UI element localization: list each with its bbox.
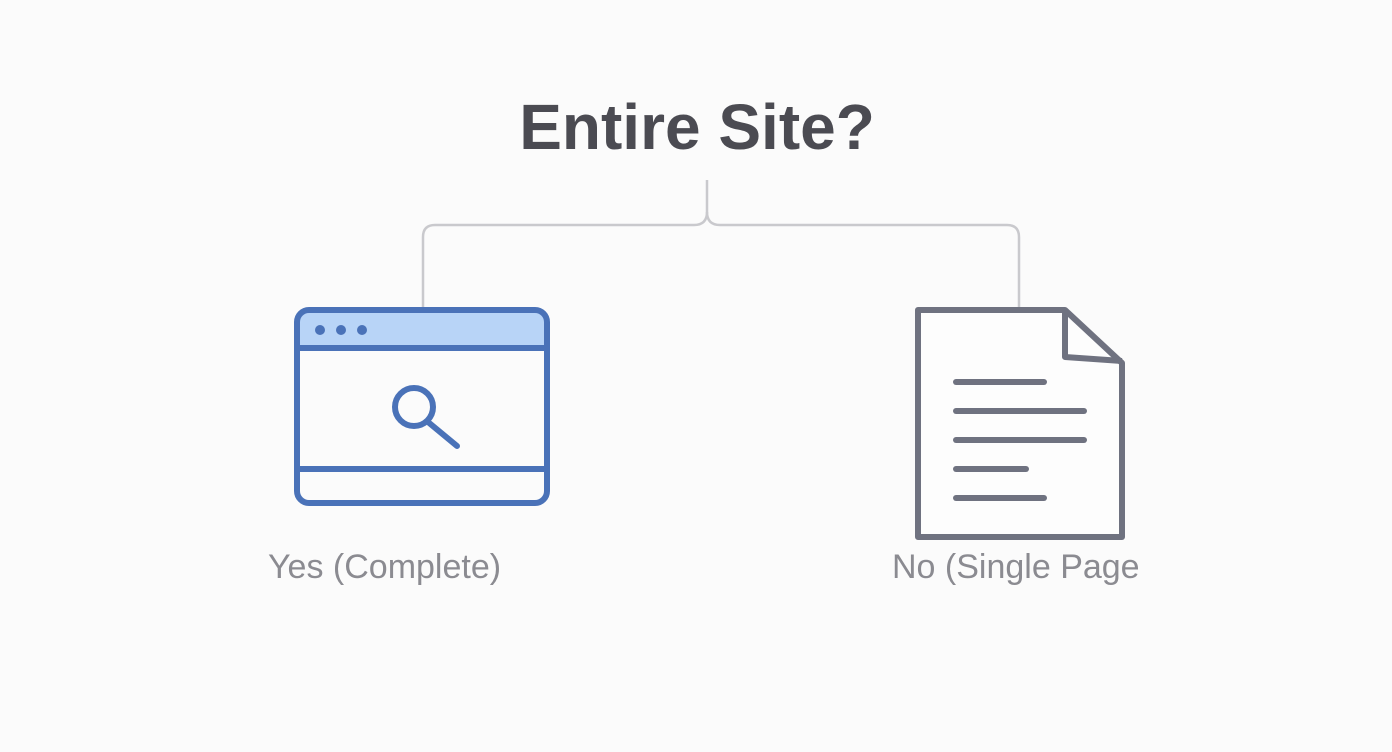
label: no: No (Single Page [892, 548, 1140, 586]
icon: browser with magnifier [294, 307, 550, 506]
title: Entire Site? [519, 91, 875, 163]
label: yes: Yes (Complete) [268, 548, 501, 586]
icon: document [915, 307, 1125, 540]
